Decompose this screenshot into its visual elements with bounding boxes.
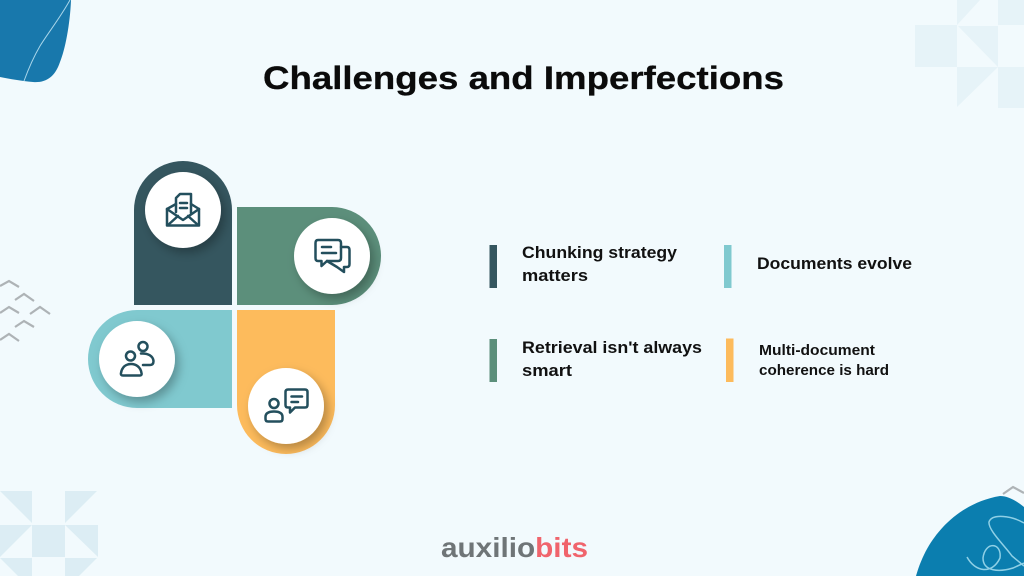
icon circle: chat <box>294 218 370 294</box>
legend item: retrieval <box>490 339 702 382</box>
icon circle: person and speech <box>248 368 324 444</box>
logo: auxiliobits: auxiliobits <box>441 532 588 563</box>
panel: green petal with chat icon <box>237 207 381 305</box>
legend item: documents evolve <box>724 245 912 288</box>
legend item: multi-document coherence <box>726 338 889 382</box>
panel: teal petal with people icon <box>88 310 232 408</box>
decoration: top-left blue blob <box>0 0 71 82</box>
decoration: bottom-left geometric pattern <box>0 491 98 576</box>
label: multi-document coherence: Multi-document <box>759 343 875 359</box>
decoration: top-right geometric pattern <box>915 0 1024 108</box>
label: multi-document coherence: coherence is hard <box>759 363 889 379</box>
decoration: left chevrons <box>0 281 50 341</box>
legend item: chunking strategy <box>490 244 678 288</box>
label: chunking strategy: Chunking strategy <box>522 244 678 262</box>
label: retrieval: Retrieval isn't always <box>522 339 702 357</box>
label: retrieval: smart <box>522 362 573 380</box>
icon: chat bubbles <box>316 240 350 272</box>
label: chunking strategy: matters <box>522 267 588 285</box>
icon circle: people <box>99 321 175 397</box>
title: Challenges and Imperfections <box>263 60 784 96</box>
icon: two people <box>121 342 154 376</box>
decoration: bottom-right chevron <box>1003 487 1024 494</box>
icon: person with speech bubble <box>266 390 308 422</box>
icon: envelope with document <box>167 194 199 226</box>
decoration: bottom-right blue blob <box>916 496 1024 576</box>
panel: orange petal with person and speech icon <box>237 310 335 454</box>
label: documents evolve: Documents evolve <box>757 255 912 273</box>
icon circle: envelope <box>145 172 221 248</box>
panel: dark petal with envelope icon <box>134 161 232 305</box>
